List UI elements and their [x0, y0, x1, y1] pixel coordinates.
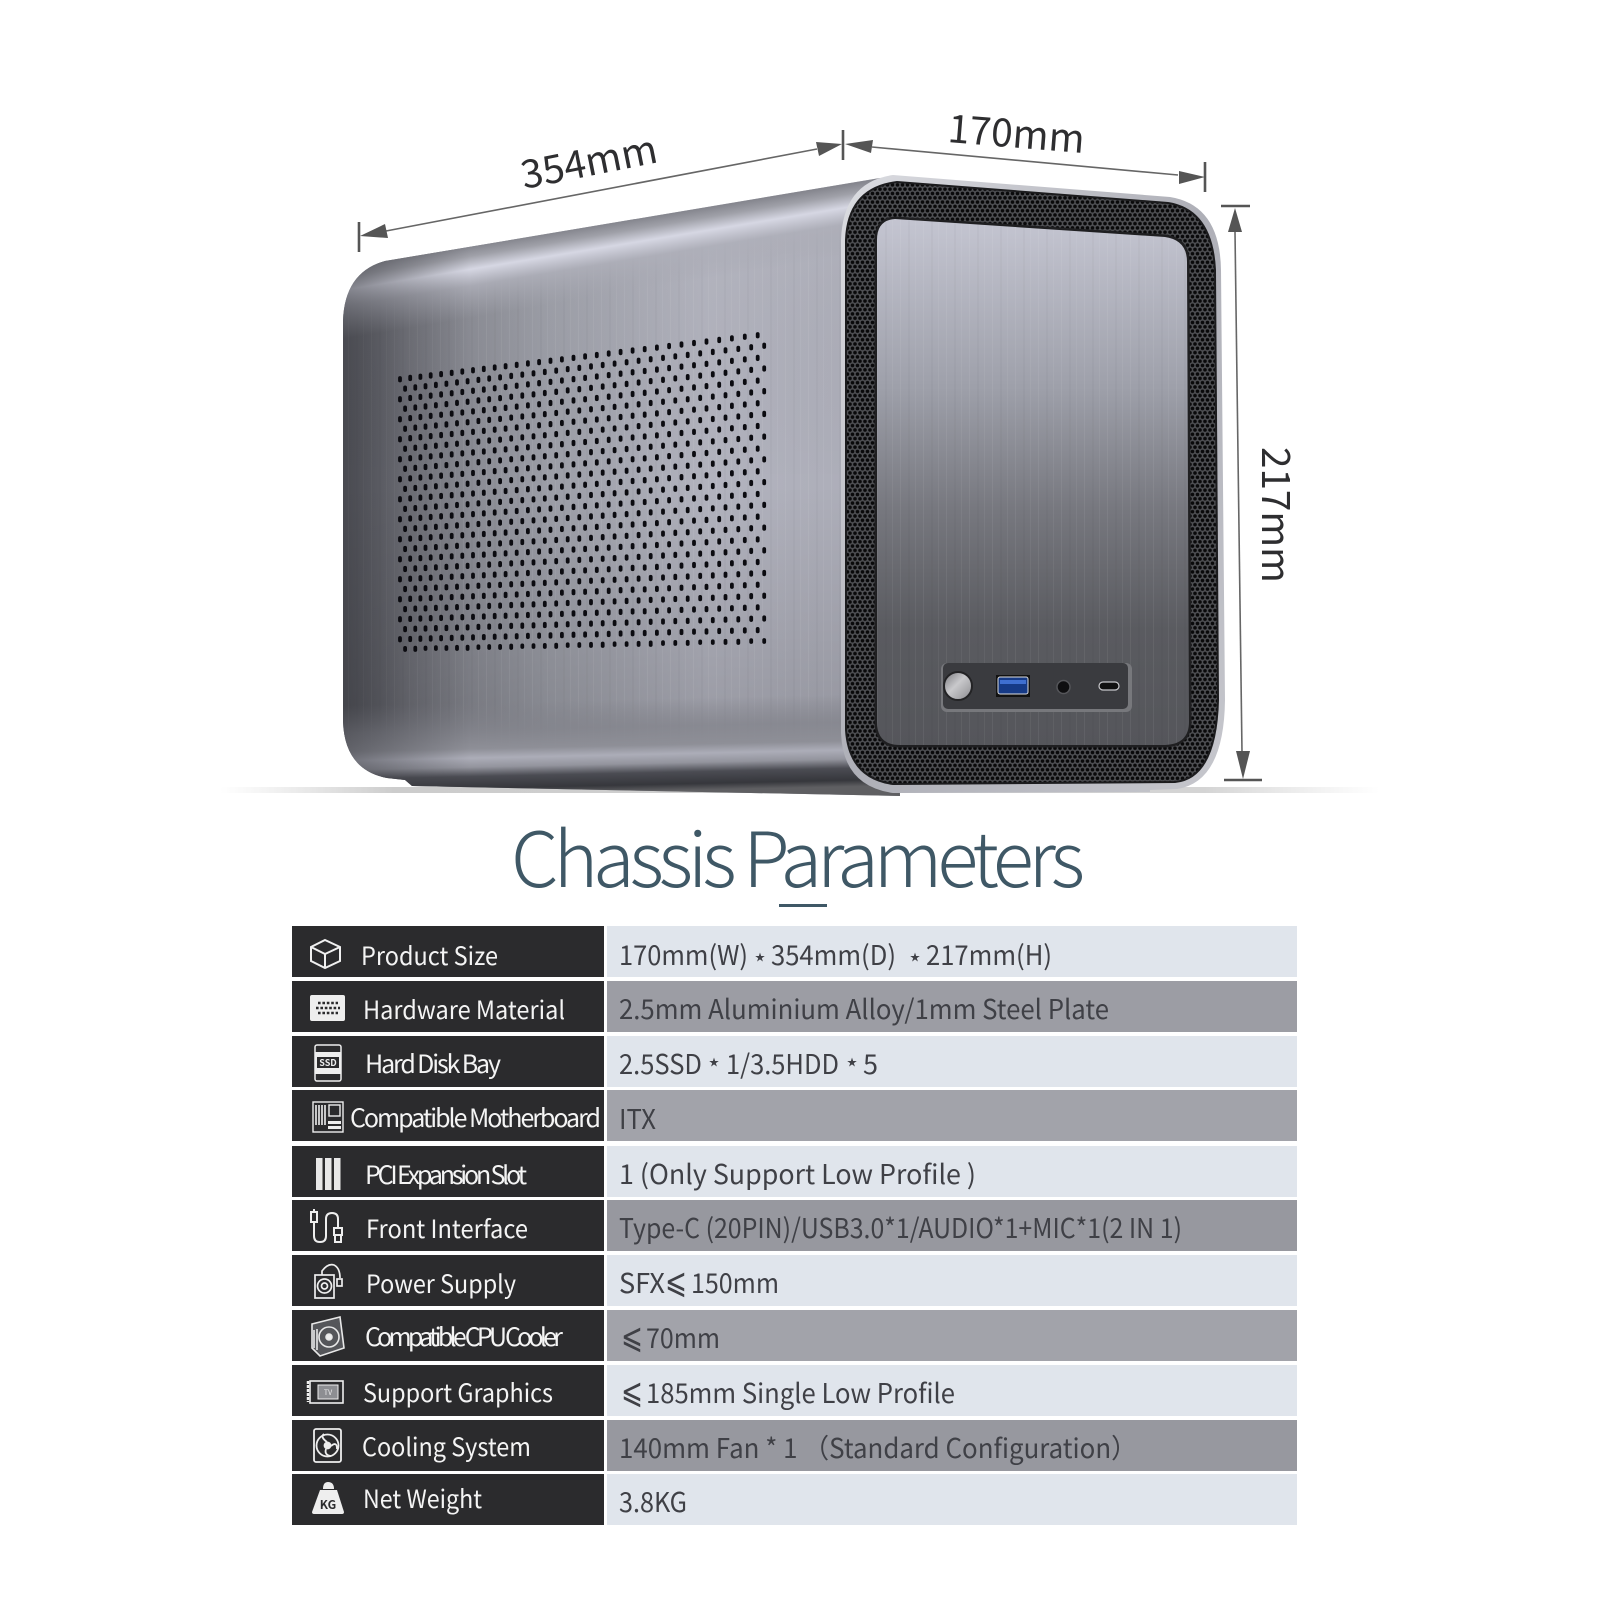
- row: Power Supply: Power Supply: [366, 1265, 516, 1301]
- side ventilation perforations: [400, 334, 764, 650]
- row: Hard Disk Bay: ★: [847, 1054, 857, 1069]
- Type-C port: [1099, 682, 1119, 690]
- row: PCI Expansion Slot: [292, 1146, 1297, 1197]
- row: Cooling System: 140mm Fan * 1 （Standard Configuration）: [619, 1427, 1137, 1466]
- icon: cube: [311, 940, 340, 968]
- row: Product Size: Product Size: [361, 937, 498, 973]
- icon: fan: [314, 1429, 341, 1462]
- dimension: 217mm: [1221, 206, 1306, 780]
- row: Compatible CPU Cooler: 70mm: [646, 1317, 720, 1356]
- front panel: [877, 219, 1189, 745]
- row: Hardware Material: Hardware Material: [363, 991, 565, 1027]
- row: Hard Disk Bay: 2.5SSD: [619, 1043, 702, 1082]
- icon: PCI slots: [316, 1158, 340, 1190]
- row: Net Weight: 3.8KG: [619, 1481, 687, 1520]
- row: Hard Disk Bay: ★: [709, 1054, 719, 1069]
- icon: power supply: [315, 1265, 342, 1298]
- front mesh: [846, 182, 1218, 784]
- row: Support Graphics: 185mm Single Low Profile: [646, 1372, 955, 1411]
- dimension: 217mm: 217mm: [1250, 447, 1306, 583]
- dimension: 354mm: [359, 119, 843, 252]
- row: Front Interface: Type-C (20PIN)/USB3.0*1/AUDIO*1+MIC*1(2 IN 1): [619, 1207, 1182, 1246]
- row: Support Graphics: Support Graphics: [363, 1374, 553, 1410]
- row: Hard Disk Bay: 1/3.5HDD: [726, 1043, 839, 1082]
- icon: CPU cooler: [312, 1317, 344, 1356]
- icon: motherboard: [313, 1102, 343, 1132]
- power button: [944, 672, 972, 700]
- row: Support Graphics: [292, 1363, 1297, 1416]
- row: Cooling System: Cooling System: [362, 1428, 531, 1464]
- row: Product Size: 354mm(D): [771, 934, 896, 973]
- row: Compatible Motherboard: ITX: [619, 1098, 656, 1137]
- row: Power Supply: ⩽: [665, 1253, 687, 1304]
- icon: cable: [311, 1209, 342, 1242]
- icon: SSD: SSD: [319, 1056, 337, 1069]
- dimension: 354mm: 354mm: [515, 119, 662, 201]
- row: Hardware Material: [292, 981, 1297, 1032]
- row: PCI Expansion Slot: 1 (Only Support Low Profile ): [619, 1153, 976, 1192]
- spec table: [292, 926, 1297, 1525]
- USB port: [996, 675, 1030, 697]
- floor shadow: [220, 787, 1380, 793]
- IO port panel: [941, 663, 1132, 712]
- row: Support Graphics: ⩽: [621, 1363, 643, 1414]
- row: Power Supply: SFX: [619, 1262, 666, 1301]
- row: Hard Disk Bay: Hard Disk Bay: [365, 1045, 501, 1081]
- row: Product Size: 170mm(W): [619, 934, 748, 973]
- row: Compatible CPU Cooler: ⩽: [621, 1308, 643, 1359]
- row: Product Size: [292, 926, 1297, 977]
- icon: KG weight: KG: [320, 1496, 336, 1513]
- title underline: [779, 904, 827, 907]
- row: Product Size: ★: [910, 949, 920, 964]
- row: Hard Disk Bay: [292, 1036, 1297, 1087]
- row: Front Interface: Front Interface: [366, 1210, 528, 1246]
- icon: perforated plate: [310, 995, 345, 1021]
- row: Net Weight: [292, 1474, 1297, 1525]
- row: Product Size: 217mm(H): [926, 934, 1052, 973]
- chassis illustration: [340, 170, 1225, 800]
- icon: graphics card: [308, 1381, 343, 1403]
- dimension: 170mm: 170mm: [946, 98, 1087, 165]
- icon: KG weight: [312, 1482, 344, 1514]
- dimension: 170mm: [845, 98, 1205, 192]
- row: Product Size: ★: [755, 949, 765, 964]
- row: Power Supply: 150mm: [691, 1262, 779, 1301]
- title: Chassis Parameters: [511, 799, 1085, 909]
- row: Compatible Motherboard: [292, 1090, 1297, 1141]
- row: Front Interface: [292, 1200, 1297, 1251]
- chassis side panel: [340, 170, 910, 800]
- row: PCI Expansion Slot: PCI Expansion Slot: [365, 1156, 528, 1192]
- row: Compatible Motherboard: Compatible Motherboard: [350, 1099, 601, 1135]
- row: Net Weight: Net Weight: [363, 1480, 483, 1516]
- icon: graphics card: TV: [324, 1388, 333, 1398]
- row: Hardware Material: 2.5mm Aluminium Alloy/1mm Steel Plate: [619, 988, 1109, 1027]
- row: Cooling System: [292, 1420, 1297, 1471]
- audio jack: [1057, 680, 1070, 694]
- icon: SSD: [315, 1045, 341, 1081]
- row: Compatible CPU Cooler: Compatible CPU Cooler: [365, 1318, 563, 1354]
- front frame rim: [841, 175, 1225, 793]
- row: Power Supply: [292, 1253, 1297, 1306]
- row: Compatible CPU Cooler: [292, 1308, 1297, 1361]
- row: Hard Disk Bay: 5: [863, 1043, 878, 1082]
